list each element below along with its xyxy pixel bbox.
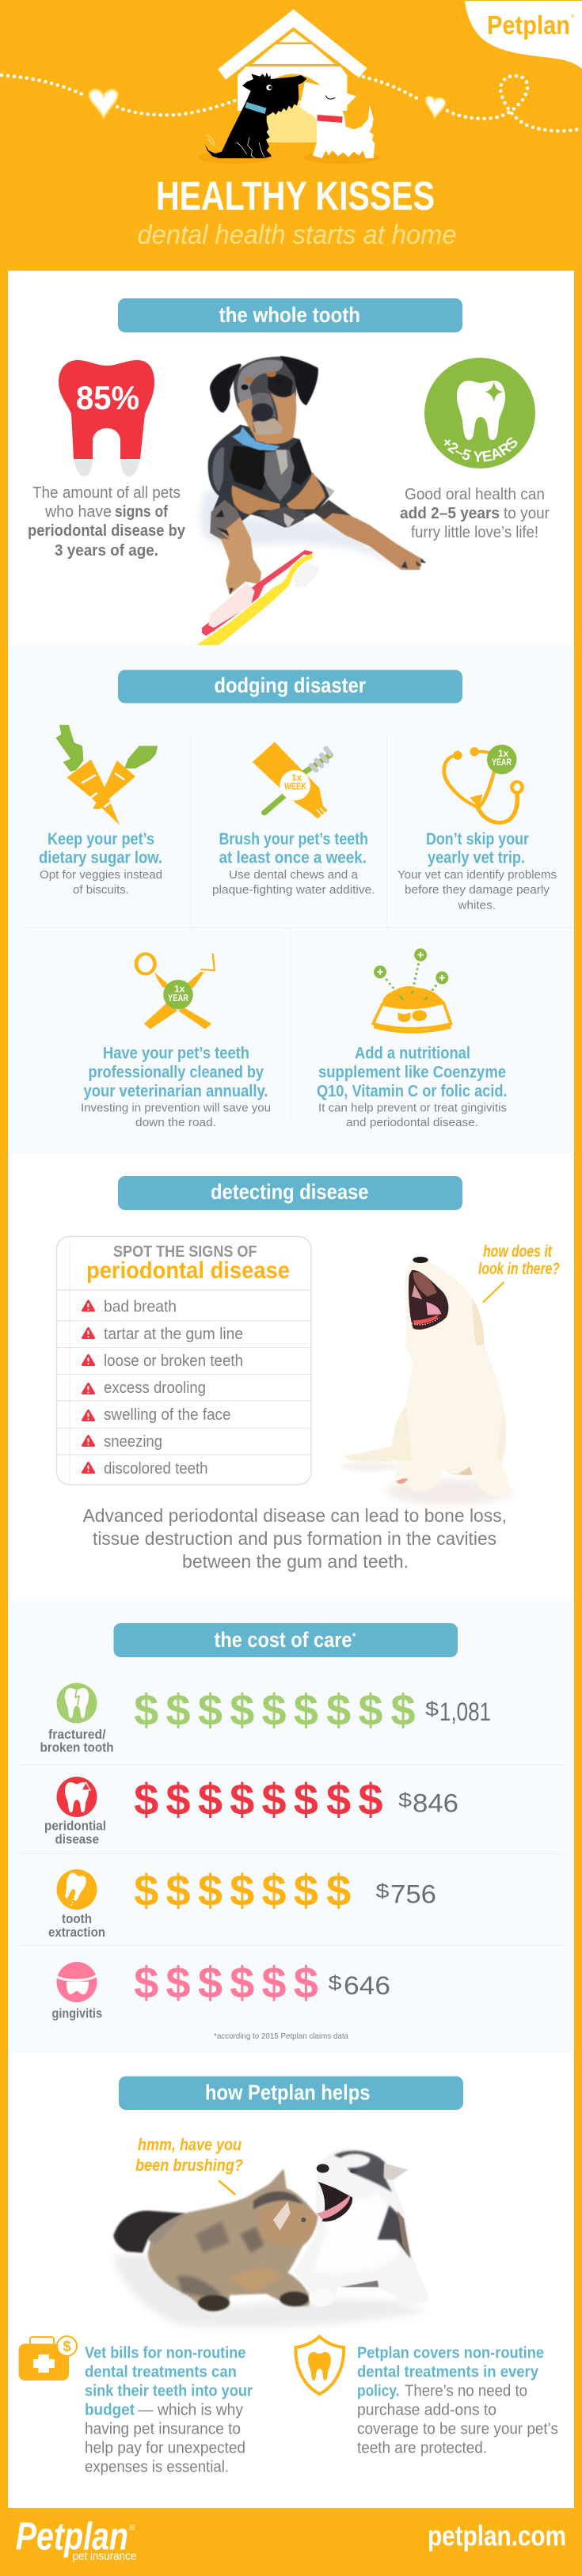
icon: shield with tooth [295, 2336, 344, 2394]
tip: brush weekly [212, 830, 375, 897]
icon: carrots [55, 725, 158, 825]
toothbrush [295, 562, 319, 587]
kitten [148, 2168, 318, 2311]
row: tooth extraction $756: $ [261, 1865, 287, 1915]
text: Petplan coverage: purchase add-ons to [357, 2401, 496, 2419]
heading bar: the cost of care [114, 1623, 458, 1657]
row: periodontal disease $846: $ [261, 1774, 287, 1824]
speech: how does it look in there: how does it [483, 1242, 553, 1261]
row: tooth extraction $756: $ [294, 1865, 318, 1915]
photo: yawning puppy [340, 1257, 512, 1505]
icon: medical kit with dollar coin [19, 2336, 77, 2381]
icon: dental tools, once a year: 1x [174, 983, 185, 994]
row: tooth extraction $756: extraction [48, 1925, 105, 1940]
tip: nutritional supplement [317, 1045, 507, 1129]
list: warning signs: bad breath [104, 1298, 177, 1315]
tip: nutritional supplement: Add a nutritional [355, 1045, 470, 1062]
title: HEALTHY KISSES [156, 173, 435, 218]
panel: dodging disaster [8, 645, 574, 1154]
row: fractured tooth $1,081: broken tooth [40, 1740, 114, 1755]
text: share of pets with periodontal disease: who have [44, 503, 112, 521]
text: vet bills: sink their teeth into your [85, 2382, 253, 2400]
heading bar: the whole tooth [118, 298, 462, 332]
heading bar: detecting disease: detecting disease [211, 1180, 369, 1204]
row: gingivitis $646: $ [261, 1958, 287, 2007]
heading bar: detecting disease [118, 1176, 462, 1210]
card: spot the signs checklist: periodontal disease [86, 1258, 290, 1284]
tip: professional cleaning [81, 1045, 271, 1129]
footnote: *according to 2015 Petplan claims data [214, 2032, 348, 2041]
black dog [204, 73, 306, 158]
header [2, 1, 582, 250]
row: fractured tooth $1,081: $ [134, 1685, 158, 1735]
subtitle: dental health starts at home [138, 220, 456, 250]
icon: toothpaste and brush, once a week: WEEK [284, 780, 306, 791]
icon: food bowl with supplements [373, 948, 451, 1034]
heading bar: how Petplan helps [119, 2077, 463, 2110]
icon: red tooth 85% [59, 360, 154, 476]
card: spot the signs checklist [57, 1236, 311, 1485]
text: Petplan coverage [357, 2344, 558, 2456]
tip: nutritional supplement: Q10, Vitamin C or folic acid. [317, 1082, 507, 1100]
panel: the whole tooth [8, 271, 574, 645]
text: share of pets with periodontal disease: signs of [115, 503, 168, 521]
row: gingivitis $646: gingivitis [52, 2006, 102, 2021]
text: vet bills: having pet insurance to [85, 2421, 241, 2438]
row: tooth extraction $756: tooth [62, 1911, 92, 1926]
row: fractured tooth $1,081: $ [294, 1685, 318, 1735]
tip: dietary sugar: Opt for veggies instead [40, 868, 162, 882]
tip: nutritional supplement: supplement like Coenzyme [318, 1064, 506, 1081]
text: oral health adds years: Good oral health can [405, 486, 545, 503]
footer logo: pet insurance [72, 2549, 136, 2563]
icon: green badge +2–5 years: +2–5 YEARS [443, 437, 518, 462]
tip: professional cleaning: Have your pet’s teeth [103, 1045, 249, 1062]
row: fractured tooth $1,081: $ [165, 1685, 191, 1735]
tip: brush weekly: Brush your pet’s teeth [219, 830, 368, 848]
text: vet bills: help pay for unexpected [85, 2439, 245, 2456]
list: warning signs: swelling of the face [104, 1406, 231, 1424]
icon: green badge +2–5 years [424, 358, 535, 469]
footer logo: ® [129, 2524, 135, 2532]
text: share of pets with periodontal disease: periodontal disease by [28, 522, 186, 540]
row: periodontal disease $846: $ [326, 1774, 351, 1824]
dotted line with right heart and loop [363, 76, 582, 131]
row: fractured tooth $1,081: fractured/ [48, 1727, 106, 1742]
dog legs [211, 509, 261, 595]
photo: kitten and husky puppy [113, 2149, 429, 2328]
text: Petplan coverage: teeth are protected. [357, 2439, 487, 2456]
text: advanced disease warning: Advanced periodontal disease can lead to bone loss, [82, 1505, 507, 1526]
photo: dog with toothbrush [196, 356, 426, 645]
text: oral health adds years [400, 486, 550, 541]
row: fractured tooth $1,081: $ [390, 1685, 416, 1735]
speech: have you been brushing: been brushing? [135, 2157, 243, 2175]
tip: brush weekly: plaque-fighting water additive. [212, 883, 375, 897]
row: tooth extraction $756: $ [326, 1865, 351, 1915]
white dog [299, 82, 375, 158]
icon: red tooth 85%: 85% [76, 379, 139, 416]
footer logo: Petplan [16, 2516, 128, 2559]
tip: dietary sugar: of biscuits. [73, 883, 129, 897]
husky [293, 2149, 429, 2307]
row: gingivitis $646: $ [165, 1958, 191, 2007]
tip: dietary sugar [39, 830, 162, 897]
row: tooth extraction $756: 756 [390, 1880, 436, 1909]
speech: have you been brushing: hmm, have you [138, 2136, 242, 2154]
tip: professional cleaning: your veterinarian annually. [84, 1082, 268, 1100]
row: tooth extraction $756: $ [134, 1865, 158, 1915]
tip: dietary sugar: Keep your pet’s [48, 830, 154, 848]
logo corner: Petplan: ® [571, 14, 575, 20]
row: tooth extraction $756: $ [375, 1880, 390, 1903]
text: Petplan coverage: dental treatments in every [357, 2364, 539, 2381]
icon: stethoscope, once a year: 1x [498, 748, 509, 759]
row: periodontal disease $846: $ [230, 1774, 254, 1824]
text: share of pets with periodontal disease: The amount of all pets [32, 484, 181, 502]
list: warning signs: tartar at the gum line [104, 1326, 243, 1343]
heading bar: dodging disaster [118, 670, 462, 703]
row: fractured tooth $1,081: $ [230, 1685, 254, 1735]
row: gingivitis $646: $ [230, 1958, 254, 2007]
heading bar: dodging disaster: dodging disaster [214, 673, 366, 697]
dog body [208, 356, 426, 595]
row: gingivitis $646: $ [294, 1958, 318, 2007]
text: advanced disease warning [82, 1505, 507, 1572]
row: fractured tooth $1,081: $ [198, 1685, 223, 1735]
row: gingivitis $646: $ [198, 1958, 223, 2007]
dog ears [210, 363, 242, 413]
tip: brush weekly: at least once a week. [219, 848, 367, 867]
icon: toothpaste and brush, once a week: 1x [291, 772, 302, 783]
panel: detecting disease [8, 1154, 574, 1601]
text: vet bills: budget [85, 2401, 135, 2419]
row: fractured tooth $1,081: $ [425, 1698, 439, 1720]
footer [0, 2508, 582, 2576]
row: tooth extraction $756: $ [165, 1865, 191, 1915]
row: fractured tooth $1,081 [40, 1683, 491, 1755]
tip: brush weekly: Use dental chews and a [229, 868, 359, 882]
illustration: doghouse with two kissing dogs [198, 9, 379, 164]
row: periodontal disease $846: $ [198, 1774, 223, 1824]
row: tooth extraction $756: $ [198, 1865, 223, 1915]
row: periodontal disease $846: peridontial [44, 1819, 106, 1834]
text: oral health adds years: add 2–5 years [400, 505, 500, 522]
text: Petplan coverage: policy. [357, 2382, 399, 2400]
list: warning signs: loose or broken teeth [104, 1352, 243, 1370]
tip: nutritional supplement: and periodontal disease. [346, 1116, 478, 1129]
tip: yearly vet trip: yearly vet trip. [428, 848, 525, 867]
tip: dietary sugar: dietary sugar low. [39, 848, 162, 867]
logo corner: Petplan [465, 1, 582, 69]
row: periodontal disease $846: $ [134, 1774, 158, 1824]
card: spot the signs checklist: SPOT THE SIGNS OF [113, 1243, 257, 1261]
text: vet bills: Vet bills for non-routine [85, 2344, 245, 2362]
panel: how Petplan helps [8, 2053, 574, 2508]
list: warning signs: sneezing [104, 1433, 162, 1451]
row: fractured tooth $1,081: 1,081 [439, 1698, 491, 1726]
row: periodontal disease $846: $ [358, 1774, 383, 1824]
heading bar: the whole tooth: the whole tooth [219, 303, 360, 327]
row: periodontal disease $846: $ [294, 1774, 318, 1824]
tip: yearly vet trip: Don’t skip your [426, 830, 529, 848]
text: oral health adds years: furry little love’s life! [411, 524, 538, 541]
text: share of pets with periodontal disease [28, 484, 186, 560]
row: fractured tooth $1,081: $ [358, 1685, 383, 1735]
text: advanced disease warning: between the gum and teeth. [182, 1551, 409, 1572]
dog head [234, 357, 296, 445]
logo corner: Petplan: Petplan [487, 10, 570, 40]
text: vet bills: — which is why [138, 2401, 243, 2419]
tip: yearly vet trip: before they damage pearly [405, 883, 550, 897]
heading bar: the cost of care: * [352, 1632, 356, 1641]
list: warning signs: excess drooling [104, 1379, 206, 1397]
row: fractured tooth $1,081: $ [261, 1685, 287, 1735]
row: periodontal disease $846: disease [55, 1832, 99, 1847]
tip: yearly vet trip: whites. [457, 899, 496, 912]
dotted line with left heart [2, 75, 235, 117]
tip: professional cleaning: down the road. [135, 1116, 216, 1129]
text: Petplan coverage: There’s no need to [405, 2382, 527, 2400]
text: share of pets with periodontal disease: 3 years of age. [55, 542, 158, 560]
tip: nutritional supplement: It can help prevent or treat gingivitis [318, 1102, 507, 1114]
icon: dental tools, once a year [136, 954, 215, 1029]
row: periodontal disease $846 [44, 1774, 458, 1847]
row: gingivitis $646: $ [134, 1958, 158, 2007]
text: Petplan coverage: Petplan covers non-routine [357, 2344, 544, 2362]
icon: medical kit with dollar coin: $ [63, 2339, 71, 2354]
row: gingivitis $646 [52, 1958, 390, 2021]
icon: stethoscope, once a year [444, 745, 523, 822]
text: vet bills [85, 2344, 253, 2475]
heading bar: the cost of care: the cost of care [214, 1628, 352, 1652]
text: Petplan coverage: coverage to be sure your pet’s [357, 2421, 558, 2438]
row: tooth extraction $756 [48, 1865, 436, 1940]
icon: stethoscope, once a year: YEAR [492, 757, 512, 768]
list: warning signs [82, 1298, 243, 1478]
speech: how does it look in there [478, 1242, 560, 1302]
row: fractured tooth $1,081: $ [326, 1685, 351, 1735]
list: warning signs: discolored teeth [104, 1460, 207, 1478]
tip: yearly vet trip: Your vet can identify problems [398, 868, 557, 882]
tip: yearly vet trip [398, 830, 557, 912]
row: gingivitis $646: 646 [344, 1971, 390, 2000]
heading bar: how Petplan helps: how Petplan helps [205, 2081, 370, 2104]
row: tooth extraction $756: $ [230, 1865, 254, 1915]
tip: professional cleaning: Investing in prevention will save you [81, 1102, 271, 1114]
tip: professional cleaning: professionally cleaned by [89, 1064, 264, 1081]
panel: the cost of care [8, 1601, 574, 2053]
icon: toothpaste and brush, once a week [253, 742, 330, 818]
text: oral health adds years: to your [504, 505, 550, 522]
row: periodontal disease $846: 846 [413, 1789, 458, 1817]
speech: have you been brushing [135, 2136, 243, 2194]
dog collar [232, 427, 280, 450]
row: gingivitis $646: $ [328, 1972, 342, 1994]
text: vet bills: dental treatments can [85, 2364, 237, 2381]
row: periodontal disease $846: $ [398, 1789, 412, 1812]
text: advanced disease warning: tissue destruction and pus formation in the cavities [93, 1528, 496, 1549]
icon: dental tools, once a year: YEAR [168, 992, 188, 1003]
row: periodontal disease $846: $ [165, 1774, 191, 1824]
text: vet bills: expenses is essential. [85, 2458, 229, 2475]
